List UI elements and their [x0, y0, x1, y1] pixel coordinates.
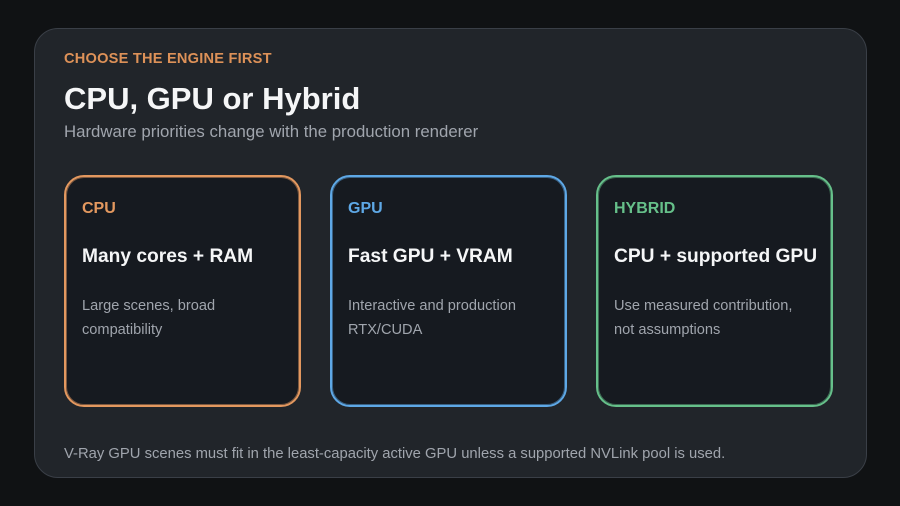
Hybrid description — [614, 298, 792, 338]
CPU description: compatibility — [82, 322, 162, 338]
CPU label: CPU — [82, 200, 116, 217]
GPU description: Interactive and production — [348, 298, 516, 314]
GPU label: GPU — [348, 200, 383, 217]
subtitle: Hardware priorities change with the production renderer — [64, 122, 478, 141]
footnote: V-Ray GPU scenes must fit in the least-capacity active GPU unless a supported NVLink pool is used. — [64, 446, 725, 462]
panel: GPU card — [330, 175, 567, 407]
eyebrow heading: CHOOSE THE ENGINE FIRST — [64, 51, 272, 67]
panel: Hybrid card — [596, 175, 833, 407]
Hybrid label: HYBRID — [614, 200, 675, 217]
CPU headline: Many cores + RAM — [82, 246, 253, 267]
GPU headline: Fast GPU + VRAM — [348, 246, 513, 267]
GPU description: RTX/CUDA — [348, 322, 422, 338]
Hybrid headline: CPU + supported GPU — [614, 246, 817, 267]
CPU description: Large scenes, broad — [82, 298, 215, 314]
panel: CPU card — [64, 175, 301, 407]
Hybrid description: not assumptions — [614, 322, 720, 338]
CPU description — [82, 298, 215, 338]
Hybrid description: Use measured contribution, — [614, 298, 792, 314]
title: CPU, GPU or Hybrid — [64, 81, 360, 116]
GPU description — [348, 298, 516, 338]
